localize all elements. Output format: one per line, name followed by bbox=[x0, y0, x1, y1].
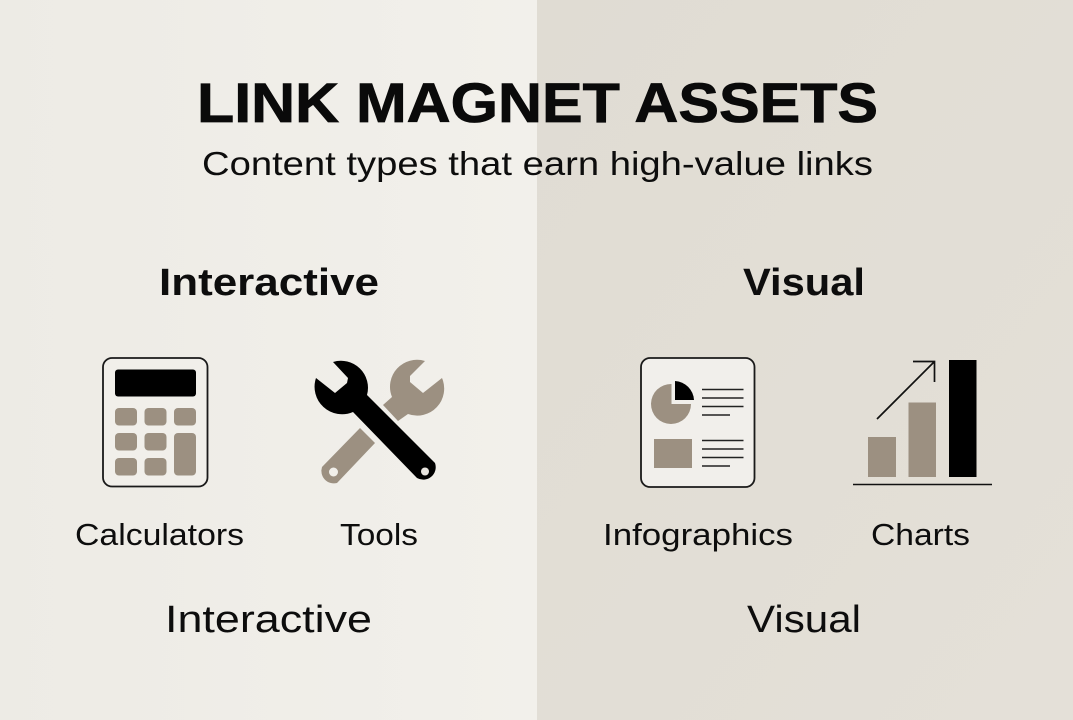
title: LINK MAGNET ASSETS bbox=[197, 71, 878, 134]
label: Infographics: Infographics bbox=[603, 517, 793, 552]
label: Charts: Charts bbox=[871, 517, 970, 552]
subtitle: Content types that earn high-value links bbox=[202, 145, 873, 182]
panel: left background bbox=[0, 0, 537, 720]
heading: Visual: Visual bbox=[743, 262, 865, 304]
icon: infographic page bbox=[641, 358, 754, 487]
caption: Visual: Visual bbox=[747, 599, 861, 641]
caption: Interactive: Interactive bbox=[165, 599, 372, 641]
panel: right background bbox=[537, 0, 1073, 720]
label: Tools: Tools bbox=[340, 517, 418, 552]
heading: Interactive: Interactive bbox=[159, 262, 379, 304]
icon: calculator bbox=[103, 358, 208, 486]
icon: wrench and spanner bbox=[315, 360, 444, 483]
icon: bar chart with arrow bbox=[853, 360, 992, 484]
label: Calculators: Calculators bbox=[75, 517, 244, 552]
